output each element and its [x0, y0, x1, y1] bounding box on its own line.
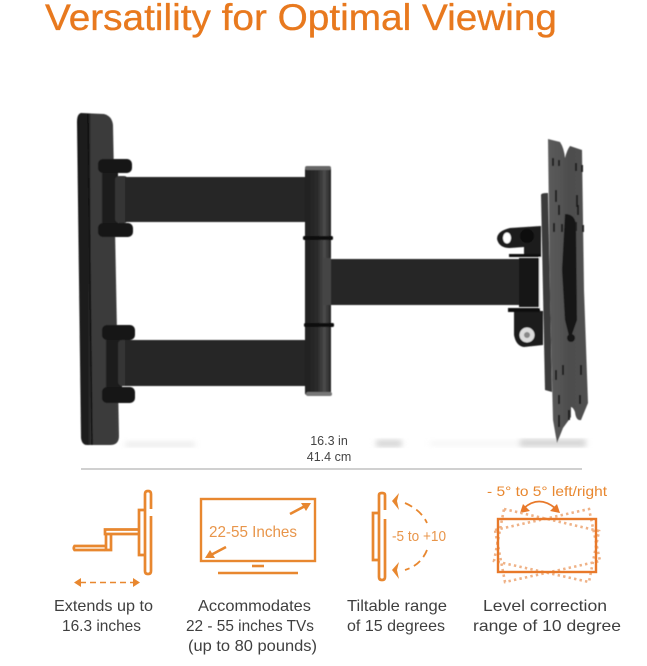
- caption: Extends up to: [54, 598, 153, 615]
- middle arm: [323, 256, 540, 309]
- caption: Level correction: [483, 598, 607, 615]
- icon: TV outline: [201, 499, 315, 573]
- tilt label: -5 to +10: [392, 529, 446, 545]
- arrow: extension range: [74, 578, 140, 587]
- dimension label: [307, 434, 351, 464]
- pivot column: [303, 166, 334, 396]
- tilt bracket top: [497, 226, 541, 257]
- lower arm: [125, 340, 308, 386]
- caption: 16.3 inches: [62, 618, 141, 635]
- photo: wall mount arm: [77, 113, 588, 447]
- caption: Accommodates: [198, 598, 311, 615]
- level label: - 5° to 5° left/right: [487, 483, 607, 499]
- feature: TV size: [186, 499, 317, 655]
- TV mounting plate: [548, 139, 588, 443]
- caption: of 15 degrees: [347, 618, 445, 635]
- arrows: tilt range: [392, 493, 427, 579]
- floor shadows: [125, 439, 586, 447]
- caption: range of 10 degree: [473, 618, 621, 635]
- icon: rotated dotted rectangles: [494, 509, 600, 582]
- caption: 22 - 55 inches TVs: [186, 618, 314, 635]
- feature: extension: [54, 491, 153, 635]
- upper arm: [125, 177, 307, 222]
- back plate: [541, 193, 552, 392]
- feature: tilt: [347, 493, 447, 635]
- icon: extending arm: [74, 491, 151, 574]
- dimension label: 41.4 cm: [307, 450, 351, 464]
- feature: level correction: [473, 483, 621, 635]
- arrow: rotation: [520, 502, 560, 513]
- caption: (up to 80 pounds): [188, 638, 317, 655]
- caption: Tiltable range: [347, 598, 447, 615]
- tilt bracket bottom: [508, 308, 543, 347]
- icon: level rectangle: [498, 519, 596, 572]
- lower hinge: [102, 325, 135, 403]
- wall plate: [77, 113, 119, 445]
- dimension label: 16.3 in: [310, 434, 348, 448]
- TV size label: 22-55 Inches: [209, 524, 297, 541]
- upper hinge: [98, 159, 133, 237]
- icon: tilt plate: [373, 493, 385, 580]
